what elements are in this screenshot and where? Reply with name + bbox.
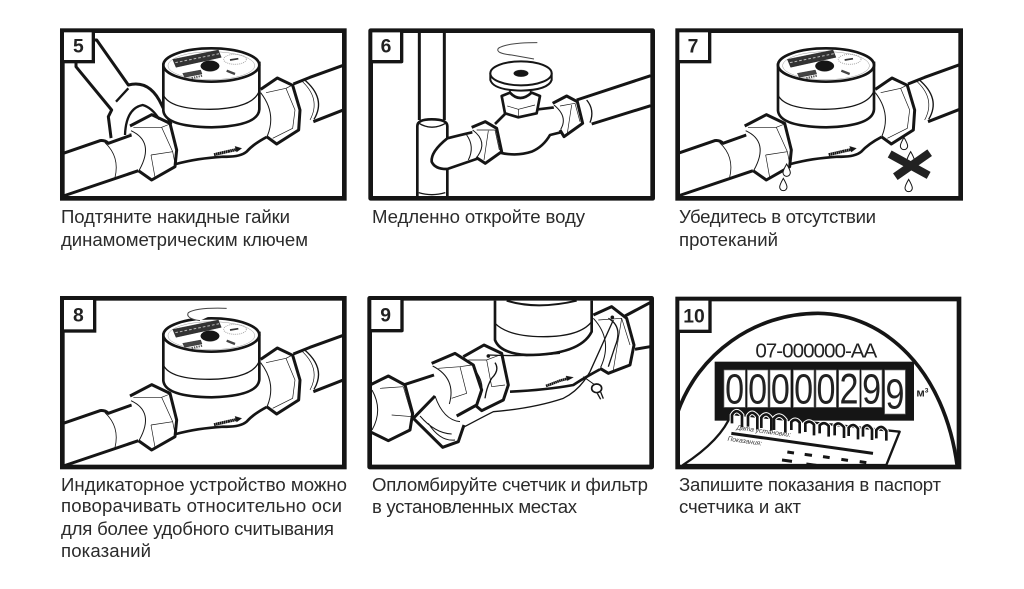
- step number 10: [678, 299, 710, 331]
- icon: wrench: [76, 40, 171, 143]
- counter digits: 2: [840, 366, 858, 413]
- caption: step 8: [61, 474, 347, 561]
- step number 10: 10: [683, 306, 705, 327]
- meter close-up with filter: [370, 301, 650, 447]
- notebook: Дата установки:: [735, 424, 791, 439]
- counter digits: 9: [862, 366, 881, 413]
- caption: step 6: Медленно откройте воду: [372, 206, 586, 227]
- step number 8: 8: [73, 305, 84, 326]
- caption: step 8: Индикаторное устройство можно: [61, 474, 347, 495]
- wrench jaw: [116, 88, 159, 135]
- lead seal: [592, 384, 603, 399]
- caption: step 8: показаний: [61, 540, 151, 561]
- counter digits: [715, 362, 914, 421]
- caption: step 5: [61, 206, 308, 250]
- caption: step 5: Подтяните накидные гайки: [61, 206, 290, 227]
- leak drops: [780, 137, 914, 192]
- meter on pipe: [63, 48, 345, 196]
- panel: step 7: [678, 31, 961, 198]
- caption: step 5: динамометрическим ключем: [61, 229, 308, 250]
- step number 7: [678, 31, 710, 62]
- counter digits: 0: [725, 366, 744, 413]
- step number 8: [62, 298, 95, 331]
- panel: step 5: [62, 31, 345, 198]
- caption: step 10: счетчика и акт: [679, 496, 801, 517]
- serial number: 07-000000-AA: [755, 339, 878, 362]
- frame: [62, 31, 344, 198]
- frame: [62, 298, 344, 467]
- valve with nuts and handwheel: [432, 61, 651, 169]
- caption: step 10: [679, 474, 941, 517]
- caption: step 8: для более удобного считывания: [61, 518, 334, 539]
- meter on pipe: [63, 318, 345, 466]
- frame: [370, 298, 652, 467]
- meter on pipe: [678, 48, 960, 196]
- frame: [678, 299, 959, 467]
- dial outline: [677, 313, 957, 467]
- seal wire: [463, 316, 618, 427]
- step number 9: [370, 298, 402, 331]
- caption: step 9: в установленных местах: [372, 496, 578, 517]
- step number 5: [62, 31, 93, 62]
- counter digits: 0: [817, 366, 835, 413]
- step number 6: 6: [381, 37, 392, 58]
- caption: step 8: поворачивать относительно оси: [61, 495, 342, 516]
- panel: step 6: [371, 31, 653, 198]
- cross mark: [890, 153, 930, 177]
- unit label: м: [916, 388, 925, 400]
- counter digits: 9: [886, 371, 904, 419]
- notebook: Показания:: [727, 436, 763, 447]
- rotation arrow: [498, 43, 537, 59]
- step number 5: 5: [73, 37, 84, 58]
- step number 7: 7: [688, 37, 698, 58]
- panel: step 9: [370, 298, 652, 467]
- counter digits: 0: [794, 366, 813, 413]
- counter digits: 0: [771, 366, 790, 413]
- rotation arrow: [188, 308, 227, 321]
- caption: step 7: протеканий: [679, 229, 778, 250]
- counter digits: 0: [748, 366, 767, 413]
- vertical riser pipe: [417, 31, 447, 198]
- step number 9: 9: [380, 305, 391, 326]
- notebook: [683, 411, 900, 465]
- panel: step 10: [677, 299, 959, 467]
- step number 6: [371, 31, 402, 62]
- frame: [678, 31, 961, 198]
- caption: step 7: [679, 206, 876, 250]
- caption: step 10: Запишите показания в паспорт: [679, 474, 941, 495]
- frame: [371, 31, 653, 198]
- caption: step 9: Опломбируйте счетчик и фильтр: [372, 474, 648, 495]
- caption: step 7: Убедитесь в отсутствии: [679, 206, 876, 227]
- unit label: 3: [925, 388, 929, 395]
- panel: step 8: [62, 298, 345, 467]
- caption: step 9: [372, 474, 648, 517]
